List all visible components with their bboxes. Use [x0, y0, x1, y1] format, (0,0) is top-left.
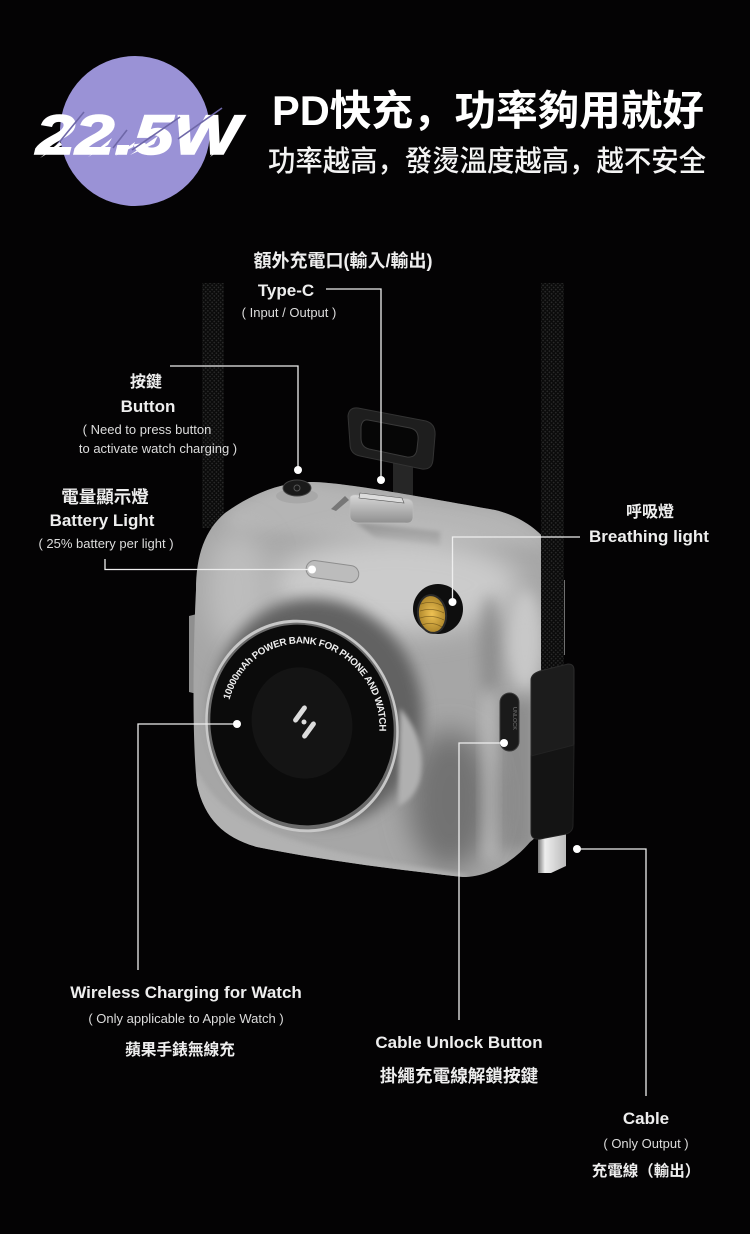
breathing light	[413, 584, 463, 635]
callout: battery light: 電量顯示燈	[61, 487, 149, 507]
lens ring text: 10000mAh POWER BANK FOR PHONE AND WATCH	[224, 636, 386, 731]
callout: battery light: Battery Light	[50, 511, 155, 530]
callout: wireless charging: 蘋果手錶無線充	[125, 1040, 235, 1059]
badge: 22.5W: 22.5W	[35, 103, 245, 166]
callout: cable: ( Only Output )	[603, 1136, 689, 1151]
callout: battery light	[38, 487, 316, 574]
callout: breathing light: Breathing light	[589, 527, 709, 546]
unlock button: UNLOCK	[511, 707, 517, 730]
callout: button: to activate watch charging )	[79, 441, 237, 456]
callout: wireless charging: Wireless Charging for Watch	[70, 983, 302, 1002]
left side tab	[189, 614, 197, 694]
callout: cable	[573, 845, 700, 1180]
cable connector	[531, 664, 574, 873]
callout: extra port: 額外充電口(輸入/輸出)	[254, 250, 432, 271]
title: PD快充，功率夠用就好	[272, 87, 704, 134]
callout: button: Button	[121, 397, 175, 416]
lightning cuts	[57, 108, 222, 150]
power button	[276, 480, 318, 504]
unlock button	[500, 693, 519, 751]
power bank body	[188, 482, 565, 885]
subtitle: 功率越高，發燙溫度越高，越不安全	[268, 145, 706, 178]
callout: cable unlock button: Cable Unlock Button	[375, 1033, 543, 1052]
callout: extra port: ( Input / Output )	[242, 305, 336, 320]
callout: breathing light	[448, 502, 709, 606]
callout: extra port: Type-C	[258, 281, 314, 300]
callout: cable: 充電線（輸出）	[592, 1161, 700, 1180]
callout: wireless charging	[70, 720, 302, 1059]
right rim	[563, 580, 565, 655]
lightning spikes	[40, 132, 232, 158]
callout: cable unlock button: 掛繩充電線解鎖按鍵	[380, 1066, 539, 1086]
type-c port	[331, 493, 413, 523]
wireless charging lens	[205, 620, 399, 832]
silicone port cap	[348, 408, 435, 498]
callout: cable: Cable	[623, 1109, 669, 1128]
callout: button: 按鍵	[130, 372, 162, 391]
badge: 22.5W	[35, 56, 245, 206]
callout: extra port	[242, 250, 432, 484]
callout: cable unlock button	[375, 739, 543, 1086]
right lanyard strap	[541, 283, 564, 673]
callout: battery light: ( 25% battery per light )	[38, 536, 174, 551]
callout: wireless charging: ( Only applicable to Apple Watch )	[88, 1011, 284, 1026]
callout: breathing light: 呼吸燈	[626, 502, 674, 521]
left lanyard strap	[202, 283, 224, 528]
callout: button	[79, 366, 302, 474]
brand logo	[292, 704, 317, 740]
callout: button: ( Need to press button	[83, 422, 211, 437]
battery indicator light	[305, 559, 360, 584]
